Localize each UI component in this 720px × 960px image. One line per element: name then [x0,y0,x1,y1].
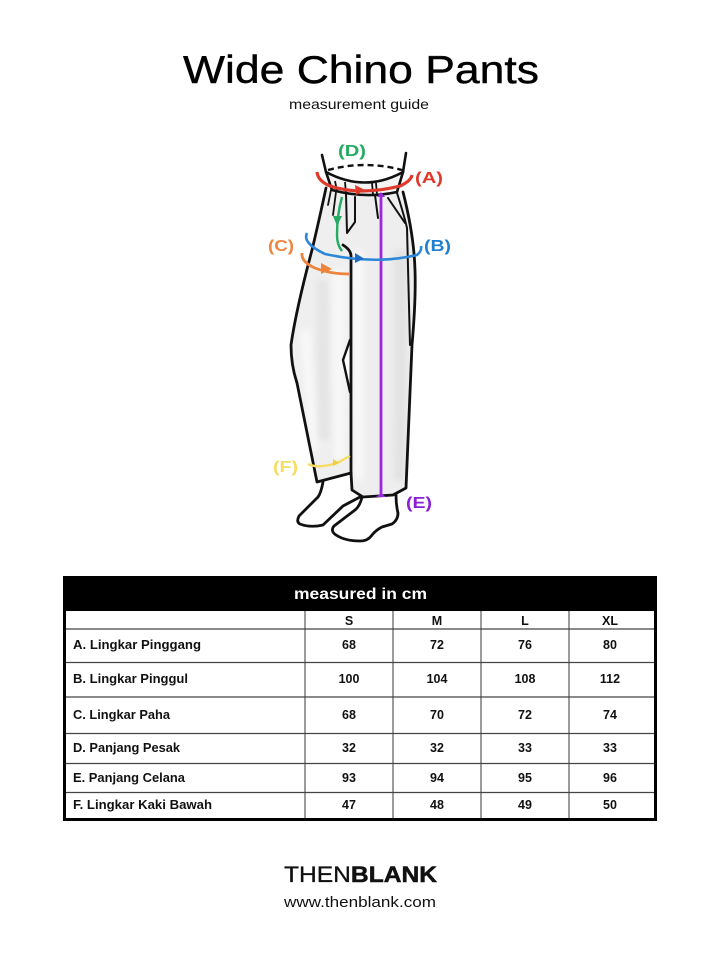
row B [73,672,620,686]
table header text: measured in cm [294,586,427,603]
row E [73,771,617,785]
row F: 49 [518,798,532,812]
row D: D. Panjang Pesak [73,741,180,755]
row D: 33 [518,741,532,755]
row A: 76 [518,638,532,652]
row D: 33 [603,741,617,755]
table header bar [63,576,657,611]
row C: 68 [342,708,356,722]
row B: 100 [339,672,359,686]
row A: 68 [342,638,356,652]
row F: 47 [342,798,356,812]
arrow B: blue hip [306,233,421,263]
table frame [64,578,656,820]
row E: E. Panjang Celana [73,771,186,785]
row D: 32 [430,741,444,755]
row F: F. Lingkar Kaki Bawah [73,798,212,812]
label D: (D) [338,143,366,160]
row E: 95 [518,771,532,785]
row C: C. Lingkar Paha [73,708,171,722]
pant outlines [291,188,415,497]
size table [63,576,657,820]
waistband [322,153,406,195]
size headers: S [345,614,353,628]
arrow C: orange thigh [302,253,349,274]
right pant leg [342,192,416,497]
label A: (A) [415,170,443,187]
row D: 32 [342,741,356,755]
row E: 96 [603,771,617,785]
row B: 108 [515,672,535,686]
title: Wide Chino Pants [183,49,539,92]
row D [73,741,617,755]
row A: 80 [603,638,617,652]
subtitle: measurement guide [289,96,429,112]
row F: 48 [430,798,444,812]
row B: 112 [600,672,620,686]
size headers: XL [602,614,618,628]
size headers [345,614,618,628]
label B: (B) [424,238,451,255]
left pant leg [291,190,352,482]
arrow F: yellow hem [308,456,350,466]
arrow E: purple length [376,192,386,497]
row F: 50 [603,798,617,812]
row B: B. Lingkar Pinggul [73,672,188,686]
fabric shading [300,250,408,480]
website: www.thenblank.com [283,894,436,911]
row C: 74 [603,708,617,722]
row A [73,638,617,652]
row A: 72 [430,638,444,652]
label F: (F) [273,459,298,476]
row C: 70 [430,708,444,722]
row A: A. Lingkar Pinggang [73,638,201,652]
icon: right foot [332,495,398,541]
label E: (E) [406,495,432,512]
row C [73,708,617,722]
row C: 72 [518,708,532,722]
brand logo: THEN BLANK [284,862,437,887]
row E: 93 [342,771,356,785]
icon: left foot [298,482,360,526]
arrow D: green inseam [333,197,342,251]
size headers: M [432,614,442,628]
label C: (C) [268,238,294,255]
row E: 94 [430,771,444,785]
row F [73,798,617,812]
row B: 104 [427,672,447,686]
pants illustration [291,153,421,541]
arrow A: red waist [317,172,412,195]
size headers: L [521,614,529,628]
